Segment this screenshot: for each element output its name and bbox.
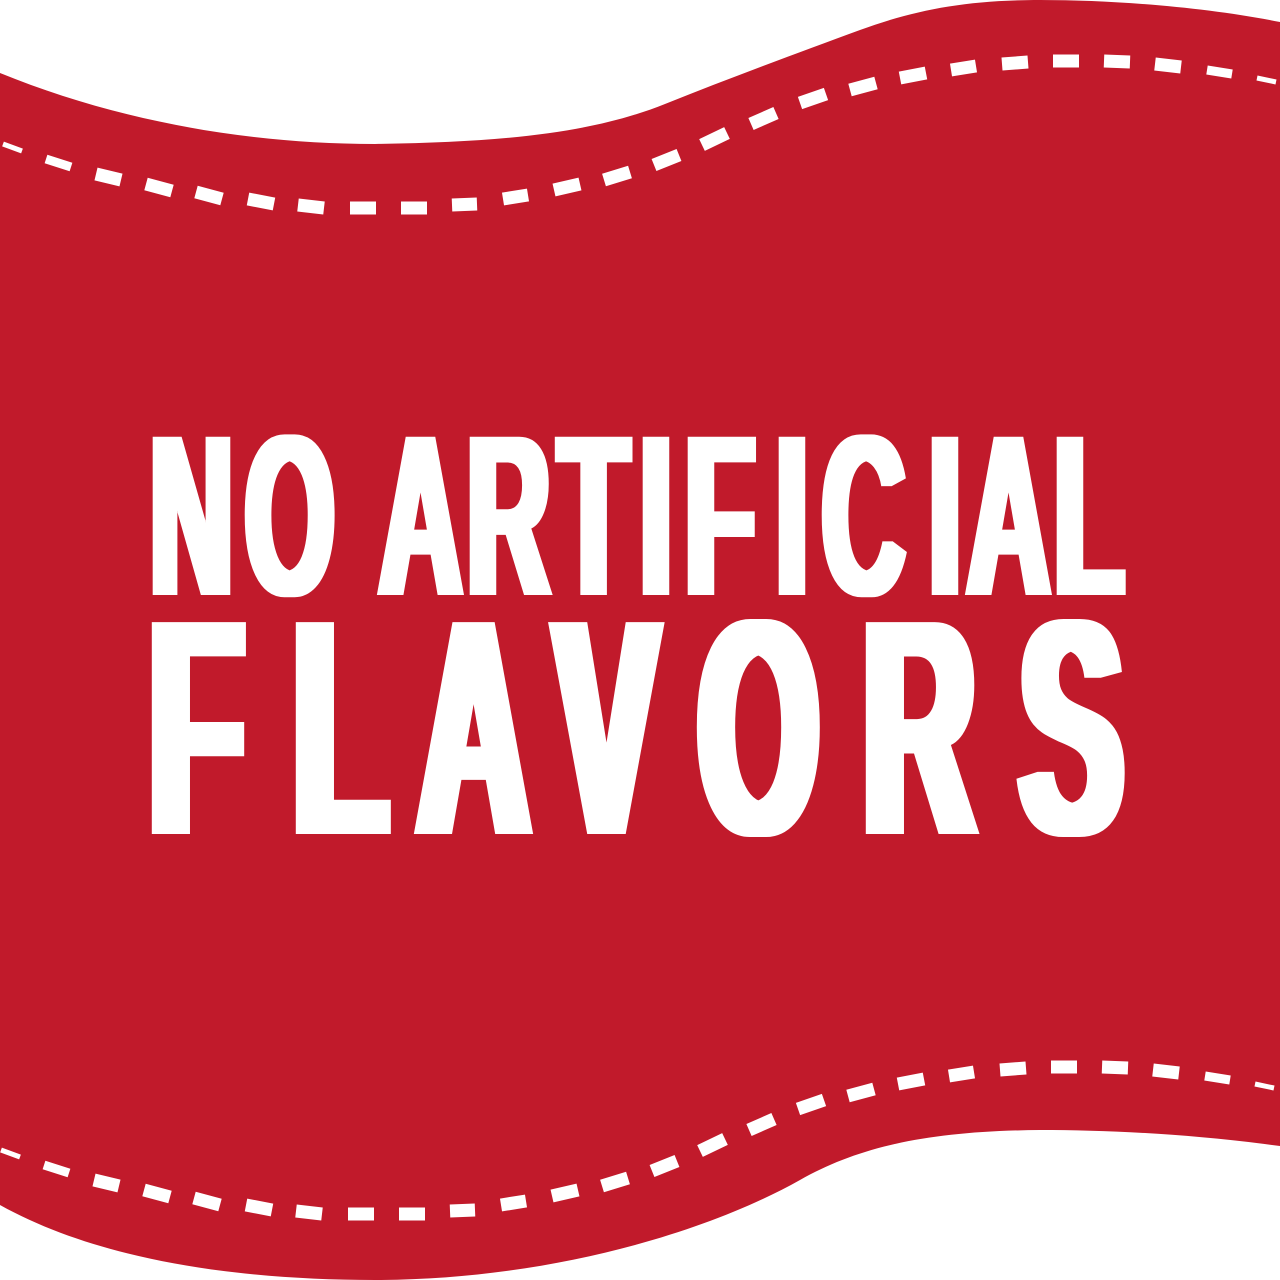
heading line: NO ARTIFICIAL: NO ARTIFICIAL [150,386,1124,644]
top stitched dashed line [3,61,1276,208]
heading line: FLAVORS: FLAVORS [150,556,1123,900]
bottom stitched dashed line [1,1067,1274,1214]
